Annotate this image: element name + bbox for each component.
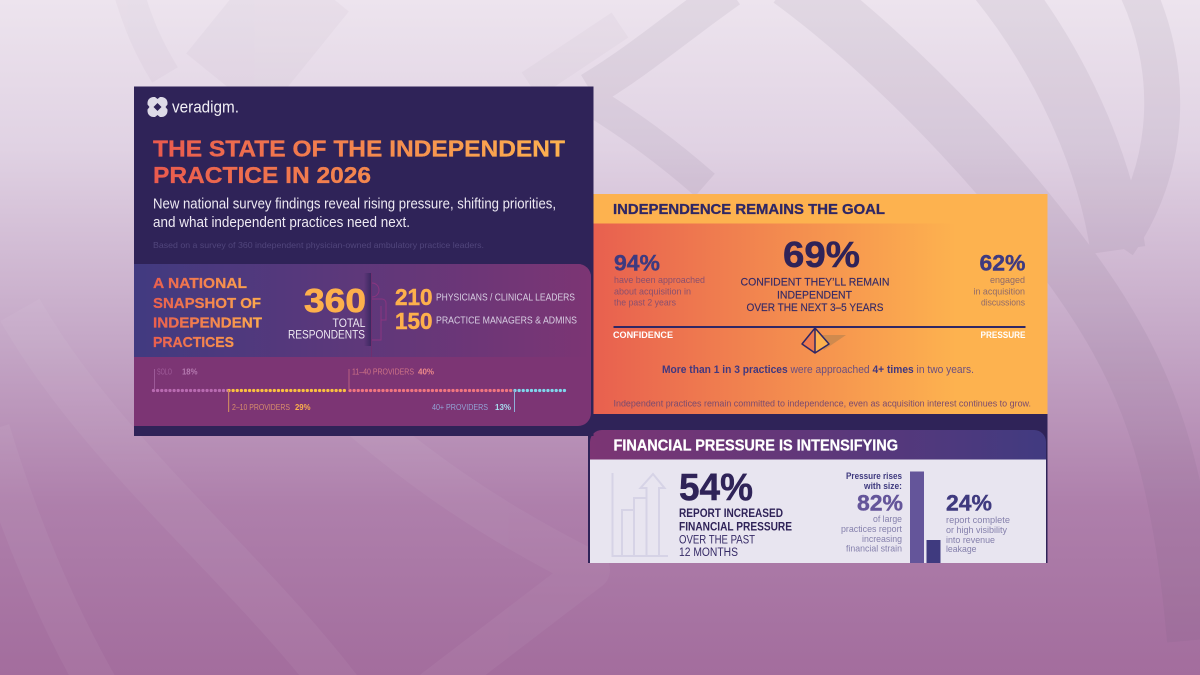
stat: 54% financial pressure [679, 467, 792, 559]
stat: 54% financial pressure: REPORT INCREASED [679, 508, 783, 520]
stat: 69% confident: OVER THE NEXT 3–5 YEARS [746, 302, 884, 314]
label: solo 18% [154, 368, 198, 390]
stat: 54% financial pressure: OVER THE PAST [679, 534, 755, 546]
stat: 24% revenue leakage: into revenue [946, 535, 995, 546]
logo: veradigm: veradigm. [172, 98, 239, 116]
balance scale: CONFIDENCE [613, 330, 673, 341]
stat: 54% financial pressure: 12 MONTHS [679, 547, 738, 559]
stat: 62% engaged [974, 250, 1026, 308]
balance scale: PRESSURE [980, 330, 1026, 341]
panel: header and national snapshot [134, 86, 594, 436]
logo: veradigm [148, 97, 239, 117]
panel: financial pressure [590, 430, 1046, 563]
label: 11-40 providers 40% [348, 368, 434, 390]
stat: 54% financial pressure: 54% [679, 467, 753, 509]
stat: 94% approached [614, 250, 705, 308]
stat: 62% engaged: engaged [990, 275, 1025, 286]
stat: 82% large practices: financial strain [846, 544, 902, 554]
icon: person outline and divider [364, 273, 386, 357]
label: 11-40 providers 40%: 11–40 PROVIDERS [352, 368, 414, 376]
balance scale [613, 326, 1026, 353]
label: 2-10 providers 29%: 29% [295, 403, 310, 412]
stat: 210 physicians: 210 [395, 284, 432, 310]
bar chart: 82% vs 24% [910, 472, 940, 563]
label: 2-10 providers 29%: 2–10 PROVIDERS [232, 403, 290, 412]
stat: 62% engaged: discussions [981, 298, 1025, 308]
stat: 94% approached: the past 2 years [614, 298, 676, 308]
stat: 360 total respondents: RESPONDENTS [288, 330, 365, 342]
subtitle: New national survey findings reveal rising pressure, shifting priorities, [153, 196, 556, 212]
title: PRACTICE IN 2026 [153, 162, 371, 188]
stat: 82% large practices [841, 471, 903, 554]
heading: financial pressure: FINANCIAL PRESSURE IS INTENSIFYING [614, 438, 898, 454]
title [153, 136, 566, 188]
stat: 94% approached: have been approached [614, 275, 705, 286]
stat: 150 practice managers: PRACTICE MANAGERS & ADMINS [436, 314, 577, 326]
stat: 69% confident: 69% [783, 234, 860, 275]
stat: 82% large practices: increasing [862, 534, 902, 545]
stat: 54% financial pressure: FINANCIAL PRESSURE [679, 522, 792, 534]
text: approached 4+ times: More than 1 in 3 practices were approached 4+ times in two years. [662, 364, 974, 376]
stat: 62% engaged: 62% [980, 250, 1026, 276]
panel: independence remains the goal [588, 194, 1048, 563]
heading: national snapshot: INDEPENDENT [153, 314, 262, 332]
dot chart: practice size [154, 368, 566, 412]
stat: 24% revenue leakage: report complete [946, 515, 1010, 526]
survey note: Based on a survey of 360 independent physician-owned ambulatory practice leaders. [153, 240, 484, 250]
stat: 82% large practices: practices report [841, 524, 902, 535]
stat: 82% large practices: Pressure rises [846, 471, 902, 482]
label: 2-10 providers 29% [228, 390, 310, 412]
stat: 24% revenue leakage: 24% [946, 490, 992, 516]
label: solo 18%: 18% [182, 368, 198, 376]
label: 40+ providers 13%: 40+ PROVIDERS [432, 403, 488, 412]
stat: 82% large practices: with size: [863, 481, 902, 492]
footnote: committed to independence: Independent practices remain committed to independence, even as acquisition interest continues to grow. [614, 398, 1031, 408]
stat: 360 total respondents [288, 282, 366, 342]
label: 40+ providers 13%: 13% [495, 403, 511, 412]
subtitle: and what independent practices need next. [153, 215, 410, 231]
heading: national snapshot [153, 275, 262, 351]
stat: 69% confident: CONFIDENT THEY’LL REMAIN [740, 276, 890, 288]
icon: rising bar chart with arrow [612, 473, 668, 556]
stat: 150 practice managers: 150 [395, 308, 432, 334]
heading: national snapshot: A NATIONAL [153, 275, 247, 292]
stat: 82% large practices: of large [873, 514, 902, 525]
stat: 150 practice managers [395, 308, 577, 334]
stat: 24% revenue leakage: or high visibility [946, 525, 1007, 536]
panel: national snapshot [134, 264, 591, 426]
heading: independence: INDEPENDENCE REMAINS THE GOAL [613, 201, 885, 218]
label: solo 18%: SOLO [157, 368, 172, 376]
stat: 94% approached: about acquisition in [614, 286, 691, 298]
stat: 69% confident [740, 234, 890, 314]
heading: national snapshot: SNAPSHOT OF [153, 295, 261, 312]
stat: 210 physicians: PHYSICIANS / CLINICAL LEADERS [436, 292, 575, 304]
stat: 62% engaged: in acquisition [974, 286, 1025, 298]
heading: national snapshot: PRACTICES [153, 334, 234, 351]
stat: 210 physicians [395, 284, 575, 310]
stat: 24% revenue leakage: leakage [946, 544, 976, 555]
stat: 360 total respondents: 360 [304, 282, 366, 319]
stat: 94% approached: 94% [614, 250, 660, 276]
label: 11-40 providers 40%: 40% [418, 368, 434, 376]
stat: 360 total respondents: TOTAL [332, 318, 366, 330]
stat: 24% revenue leakage [946, 490, 1010, 555]
subtitle [153, 196, 556, 231]
label: 40+ providers 13% [432, 390, 515, 412]
title: THE STATE OF THE INDEPENDENT [153, 136, 566, 162]
stat: 82% large practices: 82% [857, 490, 903, 516]
stat: 69% confident: INDEPENDENT [777, 290, 852, 302]
